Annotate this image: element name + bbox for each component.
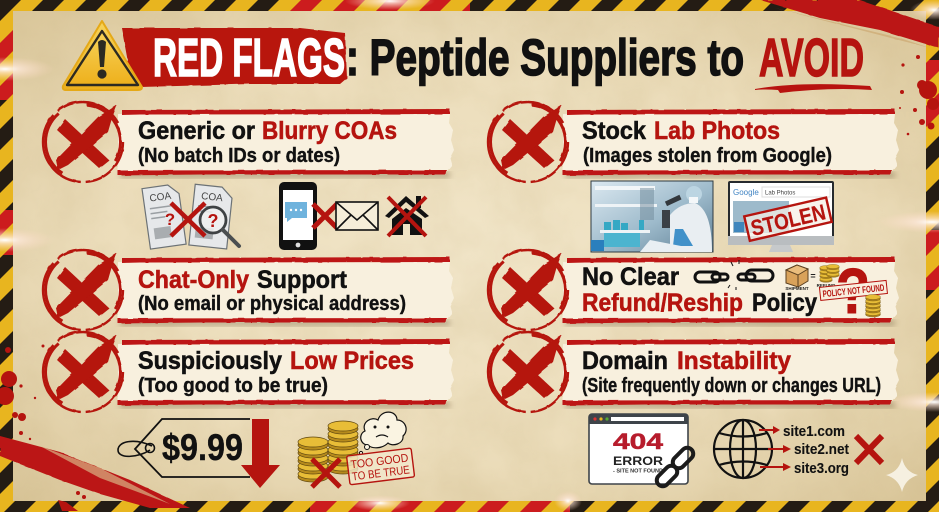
title: peptide suppliers: : Peptide Suppliers to [346, 29, 744, 86]
heading highlight: Refund/Reship [582, 289, 743, 317]
stamp: too good to be true: TOO GOOD [350, 453, 409, 472]
title [63, 21, 872, 93]
panel: generic or blurry COAs [43, 102, 454, 182]
panel: suspiciously low prices [43, 332, 454, 412]
stamp: policy not found: POLICY NOT FOUND [822, 283, 885, 300]
icon: envelope [336, 202, 378, 230]
sparkle watermark [886, 458, 918, 492]
subtext: (Images stolen from Google) [583, 145, 832, 167]
icon: COA documents with magnifier: ? [208, 211, 218, 231]
arrow: site1 [759, 426, 780, 434]
icon: monitor with stolen stamp: Lab Photos [765, 190, 795, 196]
icon: COA documents with magnifier: COA [149, 191, 172, 205]
heading: Generic or [138, 117, 255, 145]
icon: refund coins [817, 264, 839, 288]
icon: COA documents with magnifier: ? [165, 210, 175, 229]
error label: ERROR [613, 454, 663, 468]
icon: shipment box [785, 265, 809, 291]
arrow: site3 [760, 463, 791, 471]
panel: stock lab photos [488, 102, 899, 182]
icon: shipment box: SHIPMENT [785, 286, 809, 291]
arrow: site2 [768, 445, 791, 453]
stamp: policy not found [819, 280, 887, 300]
arrow: price down [241, 419, 280, 488]
site not found: - SITE NOT FOUND [613, 468, 663, 474]
icon: COA documents with magnifier [142, 184, 239, 249]
heading continued: Policy [752, 289, 817, 317]
subtext: (No email or physical address) [138, 293, 406, 315]
icon: COA documents with magnifier: COA [201, 191, 224, 204]
icon: broken chain [695, 260, 773, 290]
heading: Suspiciously [138, 347, 282, 375]
stamp: too good to be true [347, 448, 415, 485]
icon: globe with redirect arrows [714, 420, 882, 478]
title: avoid: AVOID [759, 28, 864, 88]
brush streak: bottom left [0, 436, 190, 508]
icon: price tag [118, 419, 250, 477]
heading: Stock [582, 117, 646, 145]
icon: crossed out house [385, 196, 429, 236]
heading highlight: Blurry COAs [262, 117, 397, 145]
brush streak: top right [760, 0, 939, 48]
heading: Support [257, 266, 348, 294]
avoid underline [755, 84, 872, 93]
blood splatter: left [0, 344, 86, 511]
site1 label: site1.com [783, 423, 845, 440]
blood splatter: right [876, 55, 939, 135]
404: 404 [613, 429, 664, 454]
stamp: too good to be true: TO BE TRUE [351, 464, 411, 483]
icon: warning triangle [63, 21, 142, 90]
heading highlight: Low Prices [290, 347, 414, 375]
heading highlight: Lab Photos [654, 117, 780, 145]
heading highlight: Instability [677, 347, 791, 375]
image: stock lab photo [591, 181, 713, 252]
stamp: stolen: STOLEN [748, 199, 828, 241]
icon: red x [856, 436, 882, 463]
heading: No Clear [582, 263, 679, 291]
subtext: (Too good to be true) [138, 375, 328, 397]
icon: equals sign: = [810, 271, 816, 281]
panel: domain instability [488, 332, 899, 412]
site3 label: site3.org [794, 460, 849, 477]
panel: no clear refund/reship policy [488, 250, 899, 330]
icon: broken link [654, 445, 696, 489]
title: red flags: RED FLAGS [153, 28, 345, 88]
heading: Domain [582, 347, 668, 375]
icon: 404 error browser [589, 414, 696, 489]
icon: coins [866, 294, 880, 317]
site2 label: site2.net [794, 441, 849, 458]
icon: phone with chat bubble [279, 182, 337, 250]
subtext: (No batch IDs or dates) [138, 145, 340, 167]
icon: question mark: ? [836, 255, 870, 327]
icon: refund coins: REFUND [817, 283, 836, 288]
icon: monitor with stolen stamp [728, 181, 834, 252]
icon: coins with thought cloud [298, 412, 415, 487]
panel: chat-only support [43, 250, 454, 330]
heading highlight: Chat-Only [138, 266, 249, 294]
price: $9.99 [162, 427, 243, 468]
icon: monitor with stolen stamp: Google [733, 188, 759, 197]
title red brush banner [118, 28, 347, 87]
